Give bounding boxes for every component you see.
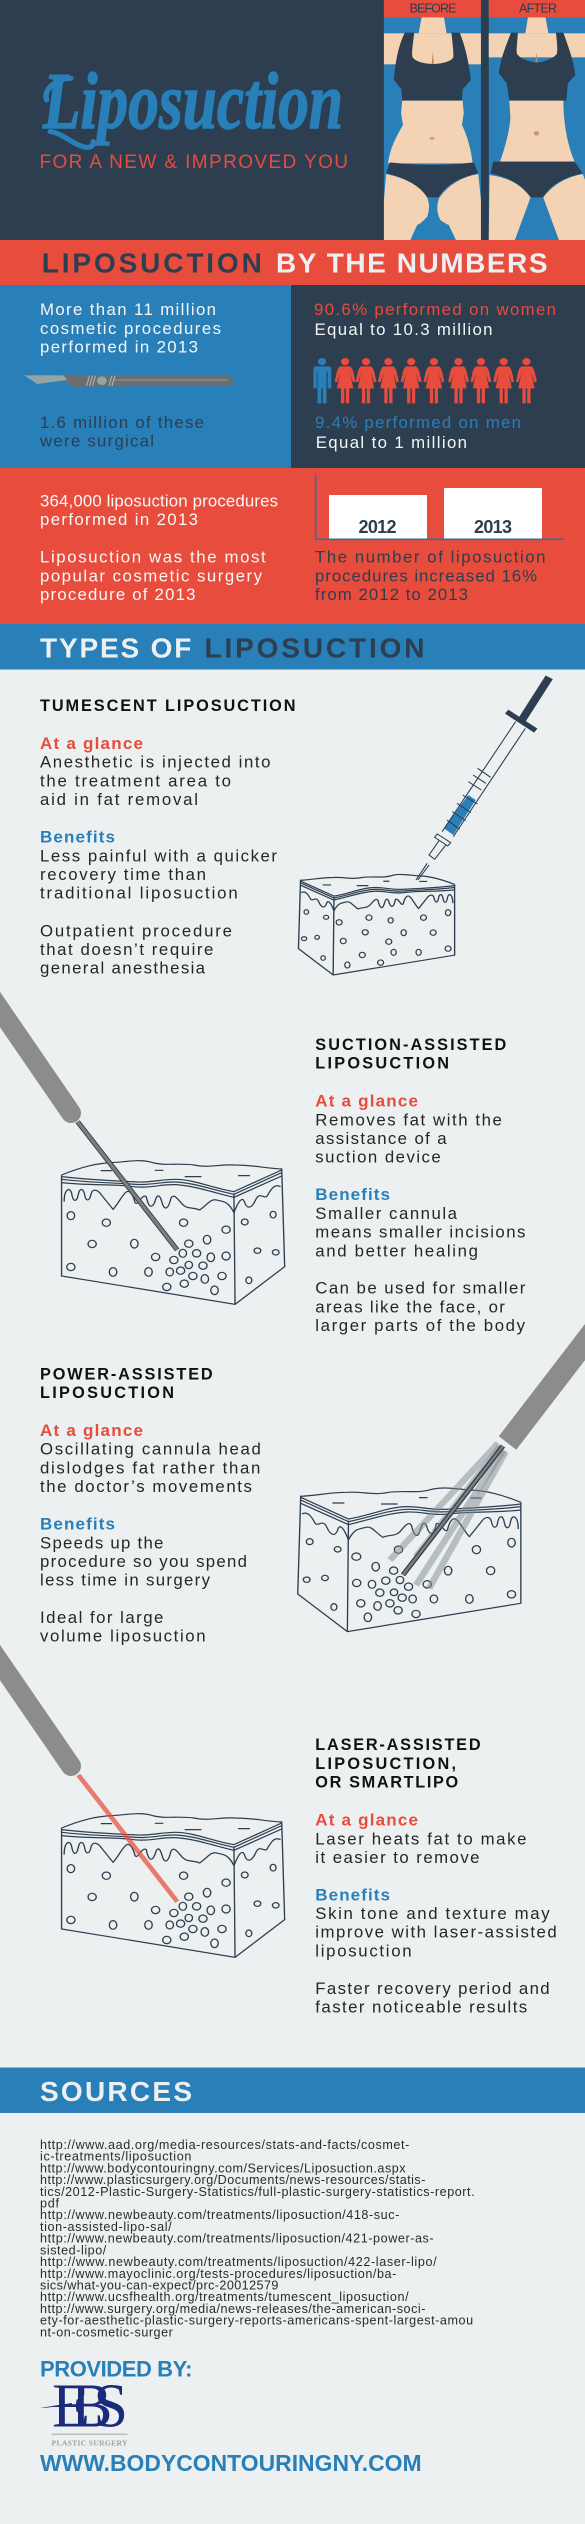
logo: EBS plastic surgery: PLASTIC SURGERY (52, 2439, 128, 2448)
illustration: oscillating cannula in skin block (298, 1443, 521, 1632)
text: source links: sisted-lipo/ (40, 2243, 107, 2257)
heading: types of liposuction: TYPES OF (40, 633, 191, 664)
text: source links: sics/what-you-can-expect/prc-20012579 (40, 2278, 278, 2292)
text: 11 million procedures: performed in 2013 (40, 338, 198, 357)
text: source links: http://www.plasticsurgery.org/Documents/news-resources/statis- (40, 2173, 425, 2187)
illustration: cannula in skin block (62, 1122, 285, 1304)
heading: types of liposuction (0, 624, 585, 670)
text: at a glance: suction device (315, 1148, 441, 1167)
text: 364,000 procedures: 364,000 liposuction procedures (40, 492, 278, 511)
text: benefits: liposuction (315, 1941, 412, 1960)
text: at a glance: aid in fat removal (40, 790, 198, 809)
text: most popular (40, 548, 266, 604)
bar chart (316, 475, 564, 539)
text: 11 million procedures (40, 300, 221, 357)
heading: liposuction by the numbers: LIPOSUCTION (42, 248, 262, 279)
heading: LIPOSUCTION, (315, 1755, 456, 1773)
heading: POWER-ASSISTED (40, 1365, 213, 1383)
text: surgical: were surgical (39, 432, 154, 451)
text: at a glance: it easier to remove (315, 1848, 480, 1867)
text: benefits: faster noticeable results (315, 1998, 527, 2017)
heading: types of liposuction: LIPOSUCTION (204, 633, 424, 664)
text: source links: tion-assisted-lipo-sal/ (40, 2220, 172, 2234)
text: benefits: Benefits (315, 1185, 390, 1204)
text: at a glance: At a glance (315, 1092, 418, 1111)
header panel (0, 0, 585, 240)
text: benefits (315, 1185, 526, 1335)
text: source links: http://www.surgery.org/media/news-releases/the-american-soci- (40, 2302, 425, 2316)
heading: liposuction by the numbers (0, 240, 585, 285)
text: benefits: Benefits (40, 1514, 115, 1533)
text: most popular: popular cosmetic surgery (40, 567, 263, 586)
text: source links: ety-for-aesthetic-plastic-surgery-reports-americans-spent-largest-amou (40, 2314, 473, 2328)
text: at a glance: Removes fat with the (315, 1110, 502, 1129)
text: most popular: Liposuction was the most (40, 548, 266, 567)
text: benefits: areas like the face, or (315, 1297, 505, 1316)
text: at a glance: dislodges fat rather than (40, 1458, 260, 1477)
text: source links: http://www.bodycontouringny.com/Services/Liposuction.aspx (40, 2161, 406, 2175)
text: benefits: larger parts of the body (315, 1316, 526, 1335)
heading: provided by: PROVIDED BY: (40, 2357, 192, 2382)
text: benefits: means smaller incisions (315, 1223, 525, 1242)
text: surgical (39, 413, 204, 451)
title: Liposuction (42, 58, 343, 146)
text: benefits: volume liposuction (40, 1627, 206, 1646)
heading: OR SMARTLIPO (315, 1774, 458, 1792)
text: benefits (315, 1885, 557, 2017)
text: source links: nt-on-cosmetic-surger (40, 2325, 173, 2339)
heading: sources: SOURCES (40, 2076, 192, 2107)
heading (315, 1736, 481, 1792)
illustration: syringe and skin block (298, 677, 549, 975)
text: at a glance: Laser heats fat to make (315, 1829, 526, 1848)
icon: power cannula handle (508, 1290, 585, 1443)
text: benefits: improve with laser-assisted (315, 1923, 557, 1942)
text: at a glance (40, 1421, 261, 1496)
panel: suction-assisted liposuction (62, 1036, 526, 1335)
text: source links: http://www.newbeauty.com/treatments/liposuction/418-suc- (40, 2208, 399, 2222)
text: 364,000 procedures: performed in 2013 (40, 510, 198, 529)
bar chart: 2013 (474, 517, 512, 537)
bar chart: 2012 (358, 517, 396, 537)
after figure (489, 0, 585, 240)
text: source links (40, 2138, 475, 2339)
text: at a glance (315, 1092, 502, 1167)
text: benefits: Ideal for large (40, 1608, 163, 1627)
text: benefits: traditional liposuction (40, 884, 238, 903)
panel: liposuction stats (0, 468, 585, 624)
text: women: 90.6% performed on women (314, 300, 556, 319)
text: benefits: procedure so you spend (40, 1552, 247, 1571)
text: benefits: and better healing (315, 1241, 478, 1260)
text: at a glance (315, 1811, 526, 1867)
text: increased 16%: procedures increased 16% (315, 567, 537, 586)
panel: cosmetic procedures (0, 285, 291, 468)
text: source links: ic-treatments/liposuction (40, 2150, 191, 2164)
text: most popular: procedure of 2013 (40, 585, 196, 604)
text: benefits: Faster recovery period and (315, 1979, 550, 1998)
text: at a glance: At a glance (40, 734, 143, 753)
text: increased 16%: The number of liposuction (315, 548, 546, 567)
text: at a glance: At a glance (40, 1421, 143, 1440)
text: benefits (40, 828, 277, 978)
text: 11 million procedures: cosmetic procedures (40, 319, 221, 338)
text: benefits: that doesn’t require (40, 940, 213, 959)
text: benefits: Can be used for smaller (315, 1279, 526, 1298)
illustration: laser in skin block (62, 1775, 285, 1957)
heading (315, 1036, 507, 1073)
icon: scalpel (24, 375, 234, 387)
panel: laser-assisted liposuction (0, 1648, 557, 2017)
text: source links: http://www.newbeauty.com/treatments/liposuction/421-power-as- (40, 2232, 434, 2246)
text: source links: http://www.ucsfhealth.org/treatments/tumescent_liposuction/ (40, 2290, 409, 2304)
heading: SUCTION-ASSISTED (315, 1036, 507, 1054)
text: at a glance: Anesthetic is injected into (40, 753, 270, 772)
text: benefits: Less painful with a quicker (40, 846, 277, 865)
subtitle: FOR A NEW & IMPROVED YOU (40, 152, 348, 173)
text: benefits: Smaller cannula (315, 1204, 458, 1223)
text: benefits: Skin tone and texture may (315, 1904, 550, 1923)
text: source links: pdf (40, 2196, 60, 2210)
before figure (384, 0, 481, 240)
icon: laser handle (0, 1648, 71, 1766)
text: benefits: Benefits (315, 1885, 390, 1904)
heading: liposuction by the numbers: BY THE NUMBERS (276, 248, 548, 279)
text: benefits: less time in surgery (40, 1571, 211, 1590)
text: source links: http://www.mayoclinic.org/tests-procedures/liposuction/ba- (40, 2267, 396, 2281)
heading: LASER-ASSISTED (315, 1736, 481, 1754)
heading: sources (0, 2068, 585, 2113)
text: at a glance: the doctor’s movements (40, 1477, 252, 1496)
website link: WWW.BODYCONTOURINGNY.COM (40, 2450, 422, 2476)
text: increased 16%: from 2012 to 2013 (315, 585, 468, 604)
text: benefits: general anesthesia (40, 959, 206, 978)
text: surgical: 1.6 million of these (40, 413, 204, 432)
icon: suction cannula handle (0, 995, 71, 1113)
text: benefits: Benefits (40, 828, 115, 847)
text: increased 16% (315, 548, 546, 604)
text: benefits: Outpatient procedure (40, 921, 232, 940)
text: at a glance: assistance of a (315, 1129, 447, 1148)
text: women (314, 300, 556, 339)
panel: tumescent liposuction (40, 677, 549, 978)
text: source links: http://www.aad.org/media-resources/stats-and-facts/cosmet- (40, 2138, 409, 2152)
text: at a glance (40, 734, 270, 809)
heading (40, 1365, 213, 1402)
text: source links: http://www.newbeauty.com/treatments/liposuction/422-laser-lipo/ (40, 2255, 437, 2269)
panel: gender split (291, 285, 585, 468)
text: at a glance: the treatment area to (40, 771, 231, 790)
text: at a glance: Oscillating cannula head (40, 1440, 261, 1459)
text: benefits: recovery time than (40, 865, 206, 884)
text: men: 9.4% performed on men (315, 413, 521, 432)
text: 11 million procedures: More than 11 million (40, 300, 216, 319)
text: benefits: Speeds up the (40, 1533, 163, 1552)
text: source links: tics/2012-Plastic-Surgery-Statistics/full-plastic-surgery-statistics-report. (40, 2185, 475, 2199)
text: men (315, 413, 521, 452)
logo: EBS plastic surgery: EBS (52, 2372, 128, 2440)
heading: LIPOSUCTION (40, 1384, 174, 1402)
icon: people row (313, 358, 537, 403)
text: at a glance: At a glance (315, 1811, 418, 1830)
text: men: Equal to 1 million (316, 433, 467, 452)
panel: power-assisted liposuction (40, 1290, 585, 1646)
text: benefits (40, 1514, 247, 1646)
text: women: Equal to 10.3 million (314, 320, 492, 339)
heading: TUMESCENT LIPOSUCTION (40, 697, 296, 715)
text: 364,000 procedures (40, 492, 278, 529)
label: before: BEFORE (410, 2, 456, 16)
heading: LIPOSUCTION (315, 1055, 449, 1073)
label: after: AFTER (519, 2, 557, 16)
